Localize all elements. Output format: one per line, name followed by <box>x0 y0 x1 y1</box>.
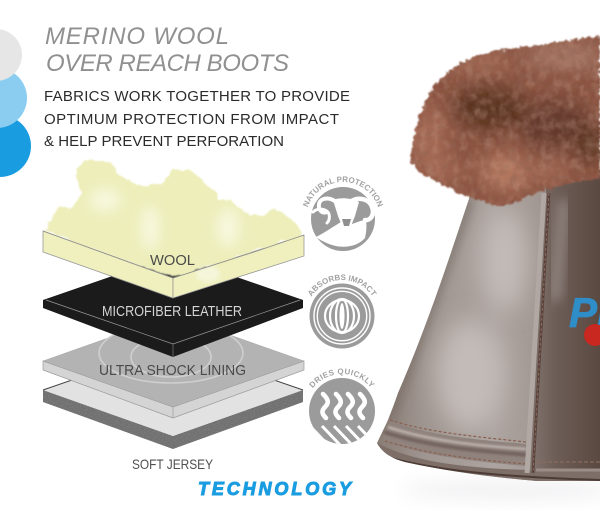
icon: absorbs impact rings: ABSORBS IMPACT <box>308 274 377 296</box>
layer labels: SOFT JERSEY <box>132 456 214 472</box>
layer labels: ULTRA SHOCK LINING <box>99 362 246 379</box>
title: MERINO WOOL <box>45 23 229 50</box>
icon: dries quickly <box>309 368 375 444</box>
icon: dries quickly: DRIES QUICKLY <box>309 368 375 388</box>
decorative circles <box>0 29 31 177</box>
layer: wool <box>43 160 304 298</box>
title: OVER REACH BOOTS <box>46 50 289 77</box>
layer: microfiber leather <box>43 255 303 357</box>
title <box>45 23 289 77</box>
boot shadow <box>400 480 600 500</box>
intro text: FABRICS WORK TOGETHER TO PROVIDE <box>44 88 350 105</box>
layer: ultra shock lining <box>43 315 304 418</box>
layer labels: MICROFIBER LEATHER <box>102 303 242 320</box>
icon: absorbs impact rings <box>308 274 377 348</box>
layer labels: WOOL <box>150 252 195 269</box>
layer labels <box>99 252 246 472</box>
intro text: & HELP PREVENT PERFORATION <box>44 133 284 150</box>
icon: natural protection ram: NATURAL PROTECTION <box>302 176 383 207</box>
technology label: TECHNOLOGY <box>198 479 353 499</box>
boot fur trim <box>409 34 600 207</box>
boot leather <box>370 170 600 490</box>
intro text: OPTIMUM PROTECTION FROM IMPACT <box>44 111 339 128</box>
icon: natural protection ram <box>302 176 383 251</box>
intro text <box>44 88 350 150</box>
layer: soft jersey <box>43 344 303 449</box>
boot photo <box>370 30 600 490</box>
